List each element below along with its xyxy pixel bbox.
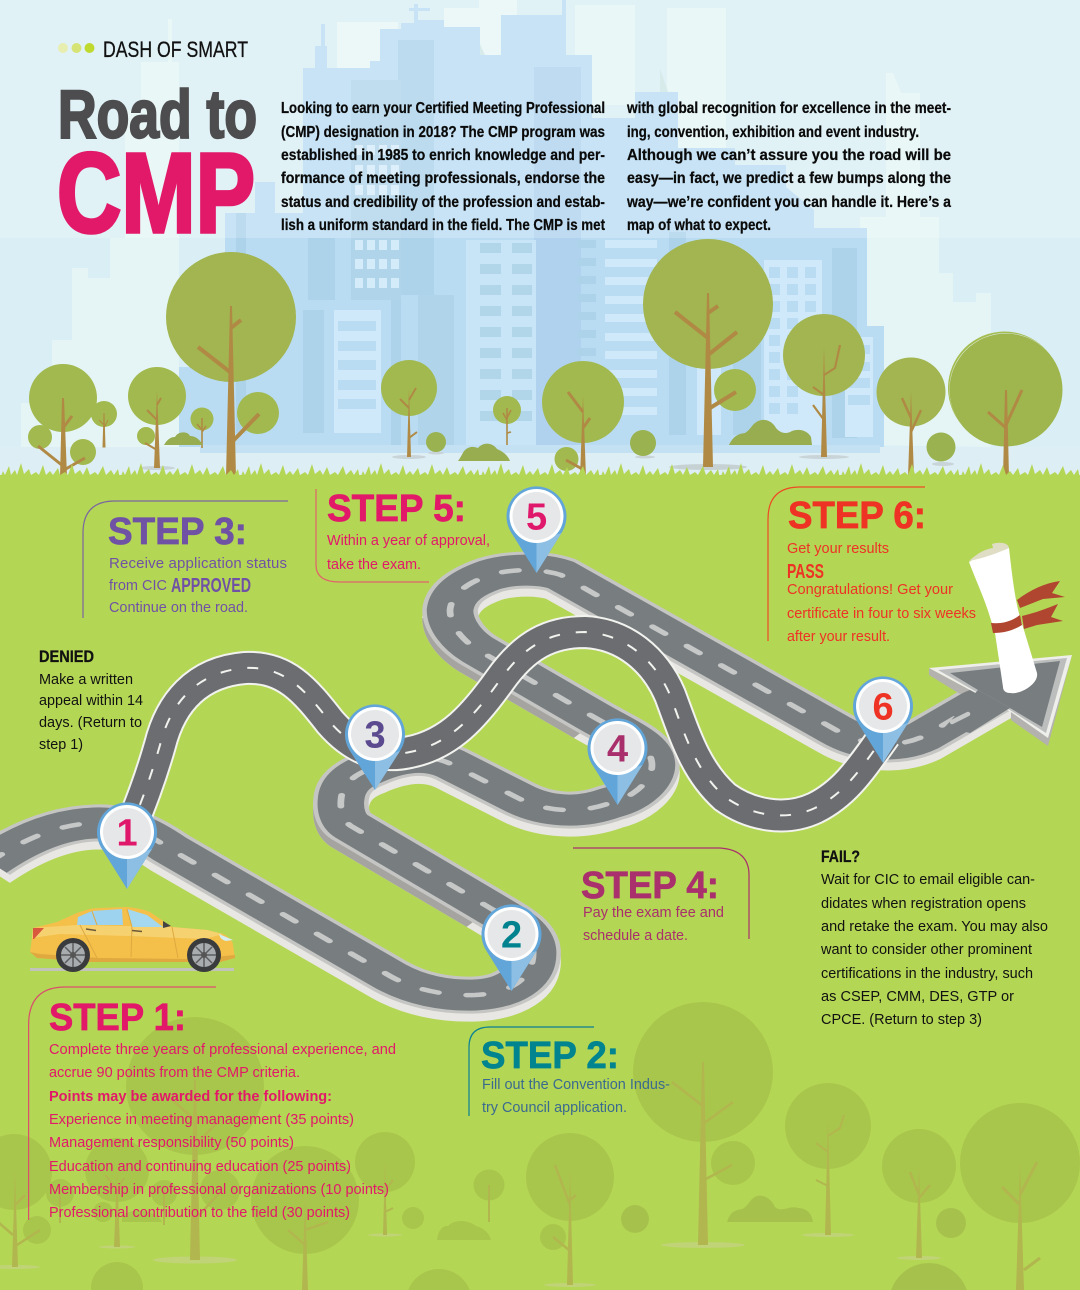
denied note: step 1) [39,736,83,753]
step 1 block: Education and continuing education (25 points) [49,1158,351,1175]
intro paragraph column 1: status and credibility of the profession and estab- [281,194,605,211]
tree [882,1129,956,1260]
step 4 block [573,848,749,944]
tree [190,408,214,448]
tree [0,1134,52,1269]
tree top [889,1263,969,1290]
shrub [621,1205,649,1233]
tree [151,1180,177,1225]
intro paragraph column 1: Looking to earn your Certified Meeting Professional [281,100,605,117]
tree [128,367,186,470]
tree [91,401,117,447]
location pin 2 [482,904,542,991]
tree top [406,1269,472,1290]
intro paragraph column 2: way—we’re confident you can handle it. Here’s a [626,194,951,211]
intro paragraph column 2: easy—in fact, we predict a few bumps along the [627,170,951,187]
fail note [820,847,1048,1028]
step 1 block: Experience in meeting management (35 points) [49,1111,354,1128]
lower ghost trees [0,1002,1080,1290]
location pin 3 [345,704,405,790]
denied note: appeal within 14 [39,692,143,709]
tree [876,358,946,477]
fail note: want to consider other prominent [820,941,1033,958]
location pin 4 [588,718,648,805]
step 5 block: take the exam. [327,556,421,573]
arrowhead [929,655,1072,746]
tree [126,1017,264,1264]
step 2 block [469,1027,670,1116]
sky background [0,0,1080,480]
flat winding road [0,570,1000,1003]
intro paragraph column 2 [626,100,951,234]
step 2 block: STEP 2: [481,1035,619,1077]
tree [948,332,1062,477]
intro paragraph column 1: established in 1985 to enrich knowledge and per- [281,147,605,164]
fail note: CPCE. (Return to step 3) [821,1011,982,1028]
intro paragraph column 2: Although we can’t assure you the road will be [627,147,951,164]
step 1 block: accrue 90 points from the CMP criteria. [49,1064,300,1081]
denied note [39,647,143,753]
bush [458,444,510,461]
step 3 block [83,501,288,618]
step 6 block: Congratulations! Get your [787,581,953,598]
intro paragraph column 1: lish a uniform standard in the field. The CMP is met [281,217,606,234]
tree [28,364,97,477]
title: Road to [58,76,257,152]
dark winding road [130,632,885,830]
tree [381,360,437,459]
shrub [93,1202,113,1222]
step 3 block: Receive application status [109,555,287,572]
step 6 block: PASS [787,561,824,583]
shrub [426,432,446,454]
tree [85,1138,149,1248]
fail note: certifications in the industry, such [821,965,1033,982]
intro paragraph column 1: (CMP) designation in 2018? The CMP program was [281,124,605,141]
tree [355,1132,415,1236]
location pin 5: 5 [526,496,547,538]
step 3 block: from CIC [109,577,167,594]
step 3 block: APPROVED [171,575,251,597]
tree [474,1170,504,1222]
location pin 6 [853,676,913,763]
step 2 block: try Council application. [482,1099,627,1116]
location pin 1 [97,802,157,889]
step 3 block: Continue on the road. [109,599,248,616]
fail note: didates when registration opens [821,895,1026,912]
tree [960,1103,1080,1290]
location pin 4: 4 [607,728,628,770]
step 2 block: Fill out the Convention Indus- [482,1076,670,1093]
bush [164,432,203,445]
step 6 block: Get your results [787,540,889,557]
step 6 block: after your result. [787,628,890,645]
step 5 block: STEP 5: [327,488,466,530]
step 6 block [768,487,976,645]
shrub [926,432,956,466]
step 3 block: STEP 3: [108,511,247,553]
intro paragraph column 1 [281,100,606,234]
tree [785,1083,871,1237]
small header: dash of smart: DASH OF SMART [103,37,248,62]
tree top [91,1262,143,1290]
title: CMP [57,130,255,256]
green ground [0,475,1080,1290]
step 1 block: Complete three years of professional experience, and [49,1041,396,1058]
bush [437,1221,491,1240]
denied note: DENIED [39,647,94,666]
step 5 block [316,488,490,582]
step 1 block [29,987,396,1221]
intro paragraph column 2: map of what to expect. [627,217,771,234]
tree [526,1133,614,1287]
title [57,76,257,256]
shrub [630,430,656,458]
shrub [402,1207,424,1229]
step 6 block: certificate in four to six weeks [787,605,976,622]
big tree right [643,239,773,470]
tree [633,1002,773,1248]
step 1 block: Membership in professional organizations (10 points) [49,1181,389,1198]
step 4 block: schedule a date. [583,927,688,944]
step 1 block: Points may be awarded for the following: [49,1088,332,1105]
intro paragraph column 2: ing, convention, exhibition and event industry. [627,124,919,141]
city skyline [0,0,1080,480]
step 6 block: STEP 6: [788,495,926,537]
icon: yellow car [30,907,235,972]
bush [122,1211,162,1222]
bush [729,420,812,445]
denied note: days. (Return to [39,714,142,731]
step 4 block: STEP 4: [581,865,719,907]
denied note: Make a written [39,671,133,688]
step 4 block: Pay the exam fee and [583,904,724,921]
step 1 block: Professional contribution to the field (30 points) [49,1204,350,1221]
tree [46,1179,74,1223]
grass edge [0,455,1080,479]
intro paragraph column 2: with global recognition for excellence in the meet- [626,100,951,117]
tree [542,361,624,477]
location pin 5 [506,486,566,573]
location pin 2: 2 [501,914,522,956]
fail note: FAIL? [821,847,860,866]
tree [195,1146,359,1290]
fail note: as CSEP, CMM, DES, GTP or [821,988,1014,1005]
fail note: and retake the exam. You may also [821,918,1048,935]
intro paragraph column 1: formance of meeting professionals, endorse the [281,170,605,187]
big tree left [166,252,296,477]
tree [493,396,521,445]
location pin 1: 1 [116,812,138,854]
shrub [936,1208,966,1238]
upper row of trees [28,239,1062,477]
step 1 block: Management responsibility (50 points) [49,1134,294,1151]
step 5 block: Within a year of approval, [327,532,490,549]
step 1 block: STEP 1: [49,997,186,1039]
location pin 6: 6 [872,686,894,728]
small header: dash of smart [58,37,248,62]
icon: diploma scroll [969,543,1065,693]
bush [727,1196,813,1222]
location pin 3: 3 [364,714,386,756]
tree [783,314,865,459]
fail note: Wait for CIC to email eligible can- [821,871,1035,888]
